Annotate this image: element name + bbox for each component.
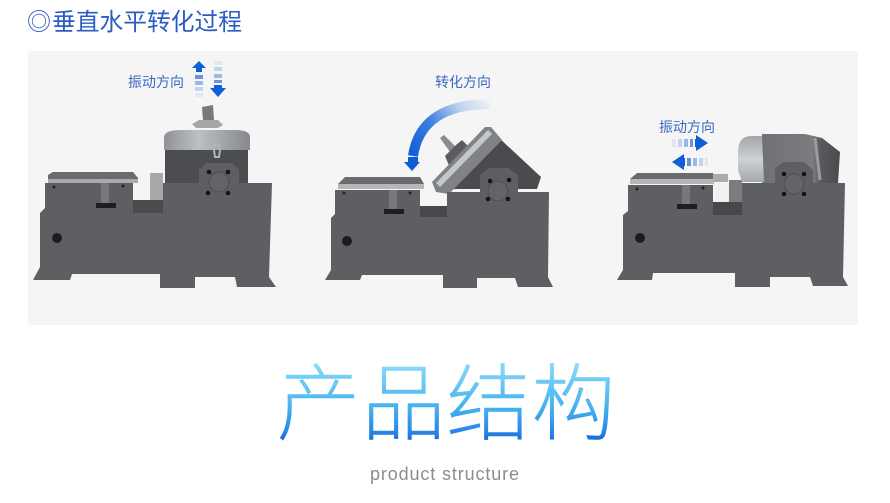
panel: photo background bbox=[28, 51, 858, 325]
channel bbox=[133, 200, 163, 213]
side hole bbox=[635, 233, 645, 243]
arrow: right bbox=[672, 135, 708, 151]
label: conversion direction: 转化方向 bbox=[435, 74, 491, 90]
label: vibration direction 1: 振动方向 bbox=[128, 74, 184, 90]
channel bbox=[420, 206, 447, 217]
subtitle: product structure bbox=[370, 464, 519, 484]
worktable bbox=[48, 172, 138, 183]
channel bbox=[713, 202, 742, 215]
base body bbox=[617, 183, 848, 287]
pivot plate bbox=[480, 168, 518, 204]
upper body horizontal bbox=[762, 134, 840, 183]
heading: ◎ bbox=[27, 9, 51, 36]
machine: tilted position bbox=[325, 127, 553, 288]
drum tilted bbox=[432, 127, 502, 194]
arrow: left bbox=[672, 154, 708, 170]
drum bbox=[164, 130, 250, 150]
label: vibration direction 2: 振动方向 bbox=[659, 119, 715, 135]
upper body bbox=[165, 150, 248, 183]
fixture tilted bbox=[440, 135, 456, 152]
pivot plate bbox=[199, 163, 239, 200]
side hole bbox=[52, 233, 62, 243]
arrow: up bbox=[192, 61, 206, 97]
heading: 垂直水平转化过程 bbox=[52, 9, 242, 36]
pivot plate bbox=[775, 162, 813, 200]
upper body tilted bbox=[447, 137, 541, 189]
base body bbox=[325, 190, 553, 288]
gap bbox=[715, 183, 729, 202]
worktable bbox=[630, 173, 716, 182]
drum side bbox=[738, 136, 764, 182]
machine: horizontal position bbox=[617, 134, 848, 287]
machine: vertical position bbox=[33, 105, 276, 288]
title: product structure chinese: 产品结构 bbox=[277, 358, 615, 451]
arrow: conversion arc bbox=[404, 104, 490, 171]
arrow: down bbox=[210, 61, 226, 97]
side hole bbox=[342, 236, 352, 246]
worktable bbox=[338, 177, 424, 189]
fixture bbox=[202, 105, 214, 120]
base body bbox=[33, 183, 276, 288]
